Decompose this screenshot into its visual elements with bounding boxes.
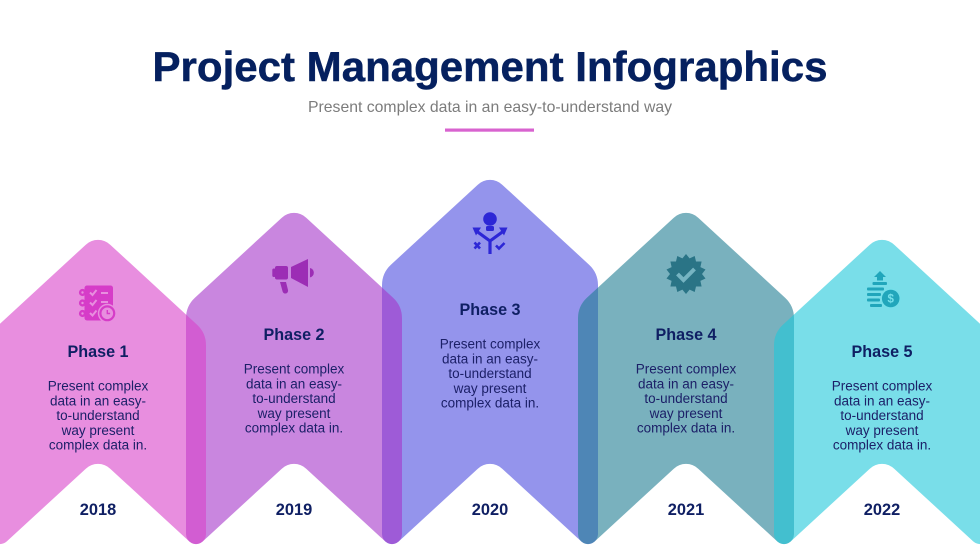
text: phase 4 description: complex data in. — [637, 420, 735, 436]
text: phase 2 description: way present — [257, 406, 331, 421]
icon: checklist with clock — [80, 286, 117, 323]
text: phase 1 description: data in an easy- — [50, 393, 146, 408]
heading: phase 5: Phase 5 — [852, 342, 912, 361]
text: phase 3 description: complex data in. — [441, 396, 539, 410]
heading: phase 3: Phase 3 — [460, 300, 520, 319]
text: phase 2 description: to-understand — [252, 391, 336, 406]
text: phase 3 description: Present complex — [440, 336, 541, 352]
text: phase 4 description: to-understand — [644, 391, 728, 406]
year: 2019: 2019 — [276, 501, 312, 519]
panel: phase 5 — [832, 271, 933, 519]
panel: phase 1 — [48, 286, 149, 519]
text: phase 5 description: way present — [845, 423, 919, 438]
chevron panels — [0, 180, 980, 544]
text: phase 5 description: Present complex — [832, 378, 933, 394]
icon: coin stack with arrow: $ — [887, 294, 894, 306]
text: phase 3 description: data in an easy- — [442, 351, 538, 366]
year: 2022: 2022 — [864, 501, 900, 519]
text: phase 1 description: complex data in. — [49, 438, 147, 452]
subtitle: Present complex data in an easy-to-understand way — [308, 99, 672, 116]
panel: phase 3 — [440, 212, 541, 519]
text: phase 2 description: data in an easy- — [246, 376, 342, 391]
heading: phase 2: Phase 2 — [264, 325, 324, 344]
text: phase 1 description: to-understand — [56, 408, 140, 423]
panel: phase 4 — [636, 254, 737, 519]
text: phase 4 description: way present — [649, 406, 723, 421]
text: phase 3 description: way present — [453, 381, 527, 396]
heading: phase 4: Phase 4 — [656, 325, 717, 344]
year: 2018: 2018 — [80, 501, 116, 519]
year: 2021: 2021 — [668, 501, 704, 519]
text: phase 1 description: way present — [61, 423, 135, 438]
icon: coin stack with arrow — [867, 271, 901, 308]
text: phase 5 description: data in an easy- — [834, 393, 930, 408]
text: phase 1 description: Present complex — [48, 378, 149, 394]
text: phase 5 description: complex data in. — [833, 438, 931, 452]
heading: phase 1: Phase 1 — [68, 342, 128, 361]
year: 2020: 2020 — [472, 501, 508, 519]
text: phase 5 description: to-understand — [840, 408, 924, 423]
panel: phase 2 — [244, 259, 345, 519]
title underline — [445, 128, 534, 132]
text: phase 3 description: to-understand — [448, 366, 532, 381]
text: phase 4 description: data in an easy- — [638, 376, 734, 391]
text: phase 4 description: Present complex — [636, 362, 737, 376]
icon: lightbulb with decision arrows — [472, 212, 508, 254]
title: Project Management Infographics — [152, 43, 828, 90]
icon: megaphone — [272, 259, 314, 294]
text: phase 2 description: Present complex — [244, 362, 345, 376]
text: phase 2 description: complex data in. — [245, 420, 343, 436]
icon: verified badge — [666, 254, 706, 294]
